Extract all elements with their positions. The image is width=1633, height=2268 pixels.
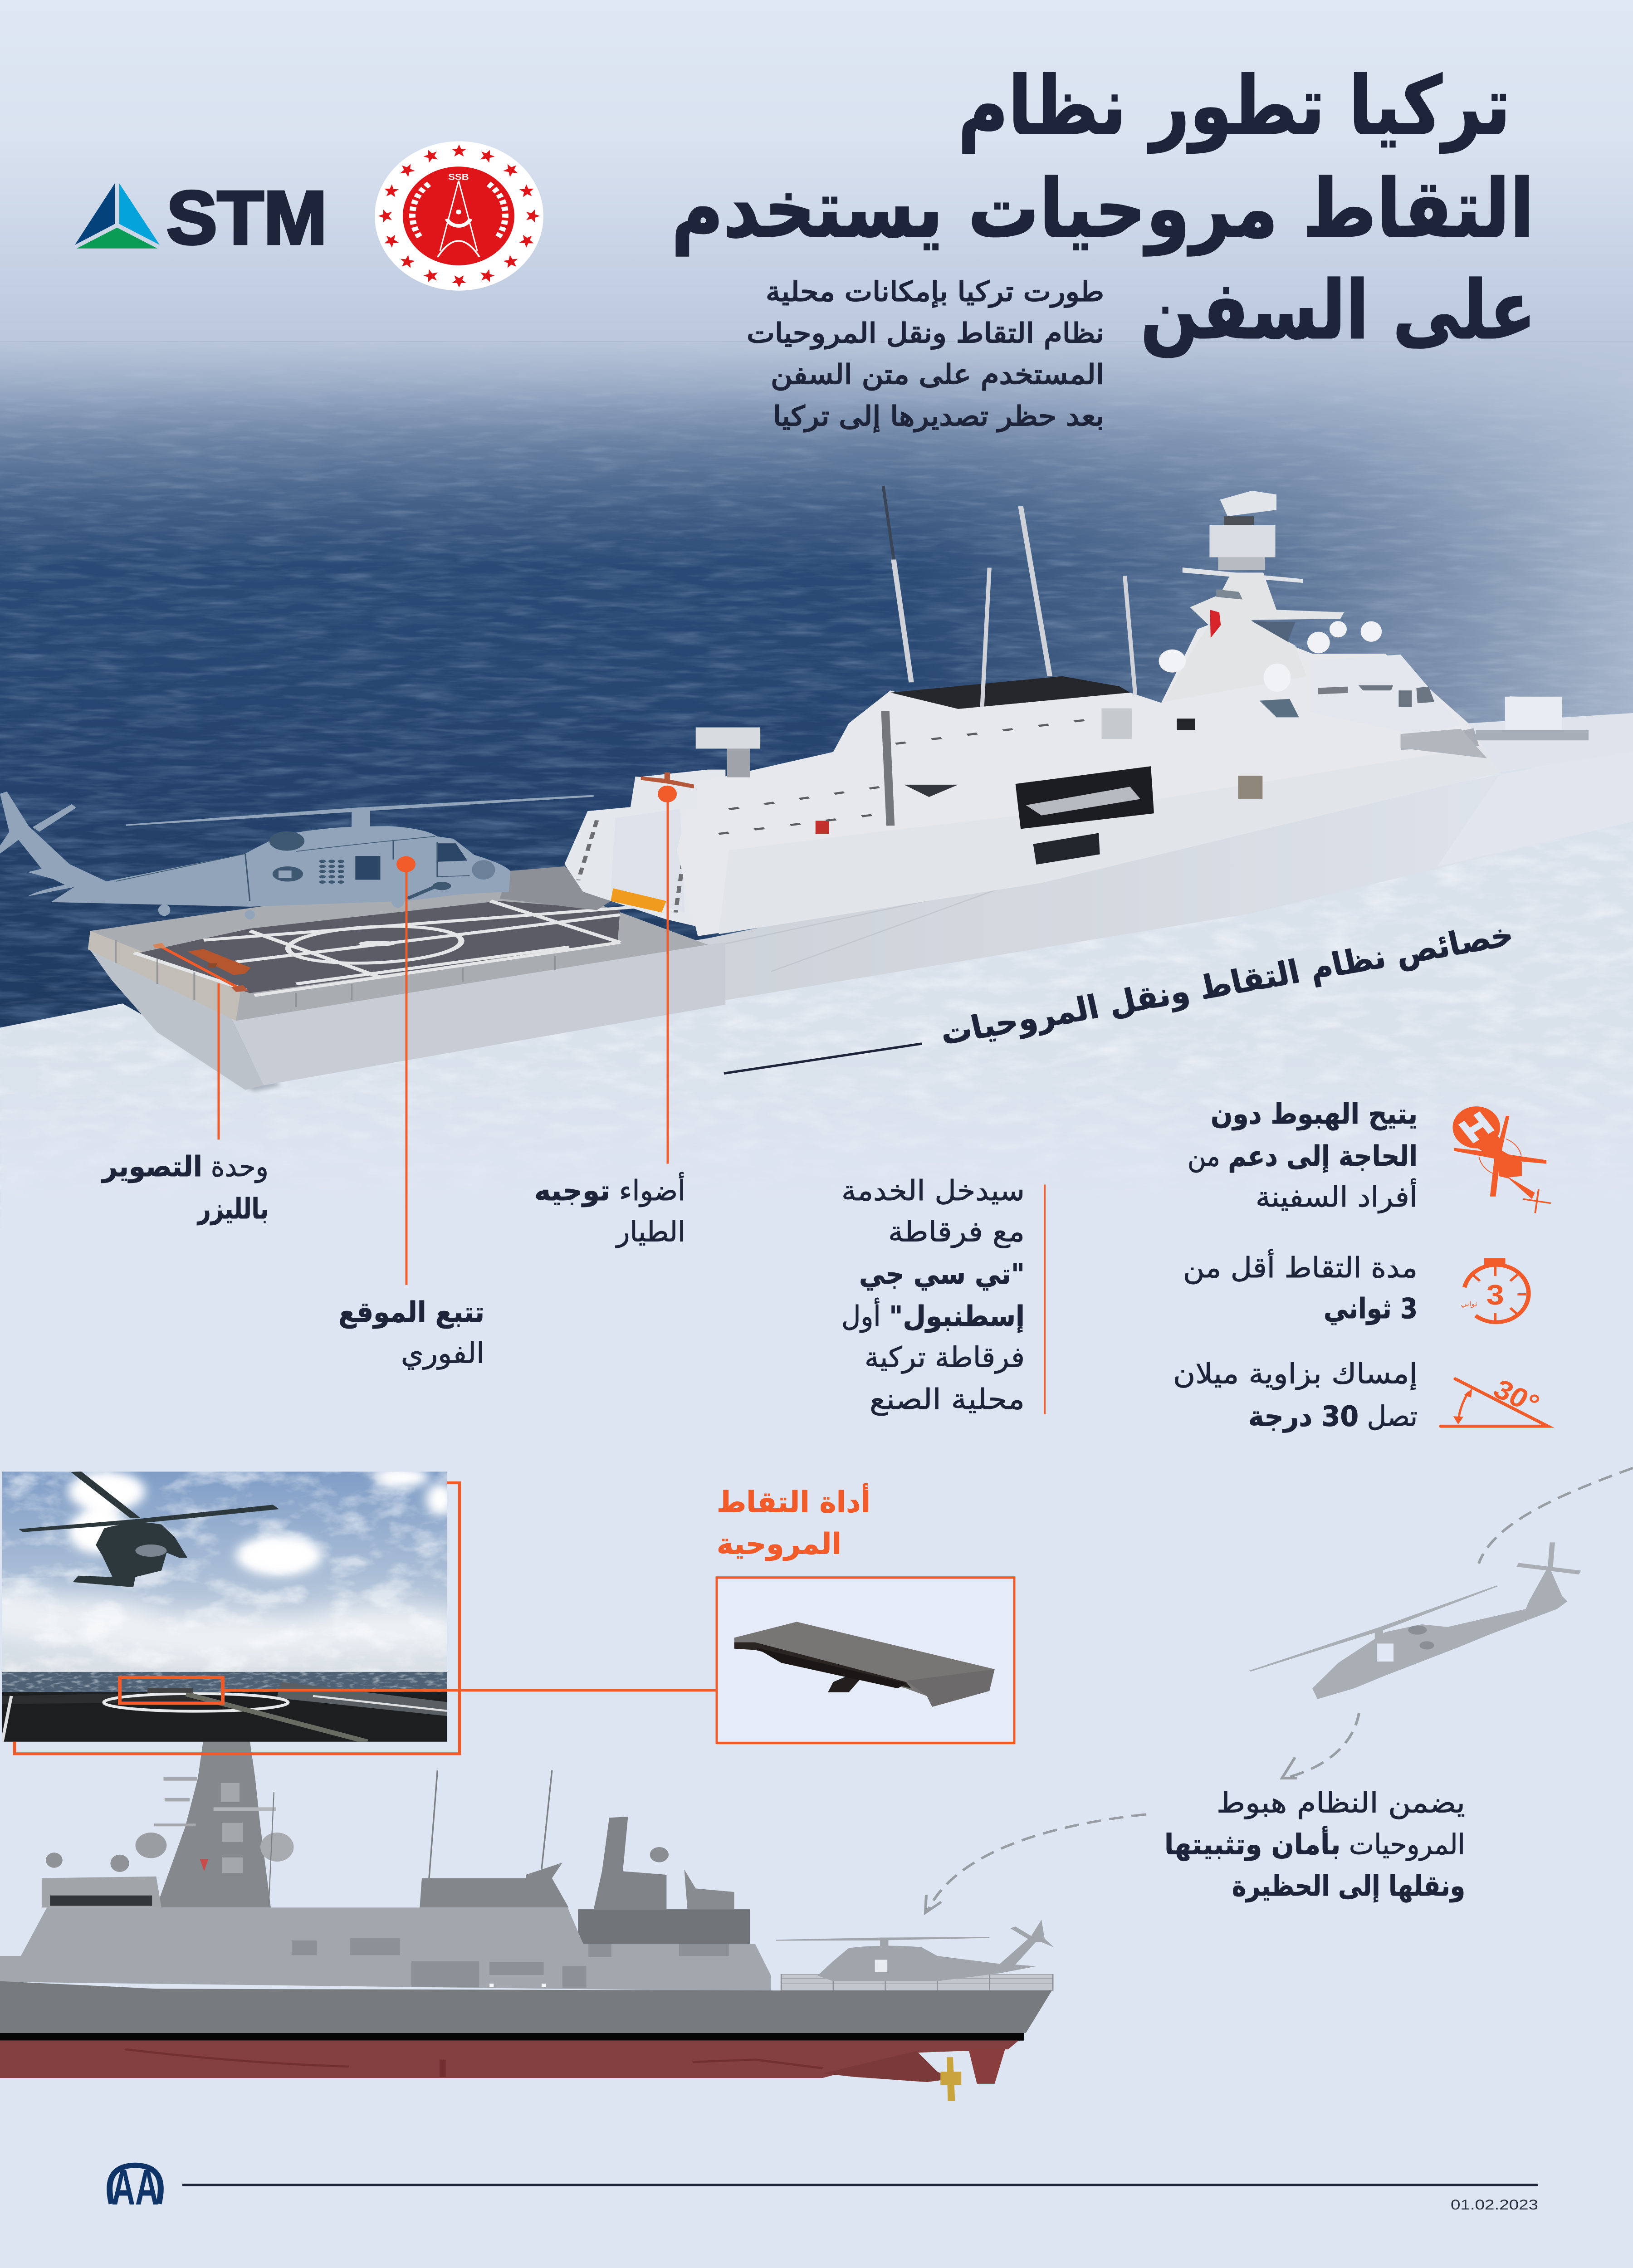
clouds (68, 1467, 454, 1575)
ship wake (0, 762, 1633, 1144)
mast and radars (1101, 491, 1589, 799)
footer: AA logo: AA (112, 2160, 159, 2216)
section heading: خصائص نظام التقاط ونقل المروحيات (937, 915, 1517, 1053)
feature: tilt (1173, 1357, 1418, 1432)
heading: capture tool: المروحية (717, 1528, 841, 1561)
text block: TCG Istanbul: إسطنبول" أول (841, 1298, 1025, 1333)
sea photo (0, 341, 1633, 1144)
top sky gradient (0, 0, 1633, 345)
footer: AA logo (110, 2160, 161, 2216)
logo: SSB emblem: SSB (448, 172, 469, 182)
subtitle: طورت تركيا بإمكانات محلية (766, 276, 1104, 308)
feature: landing: الحاجة إلى دعم من (1188, 1140, 1418, 1173)
feature: landing (1188, 1098, 1418, 1213)
text block: TCG Istanbul: "تي سي جي (859, 1258, 1025, 1290)
pointer lines (219, 786, 677, 1285)
hull side (235, 750, 1633, 1083)
label: laser imaging unit: وحدة التصوير (101, 1150, 269, 1183)
feature: tilt: إمساك بزاوية ميلان (1173, 1357, 1418, 1390)
label: real-time position tracking: تتبع الموقع (338, 1296, 484, 1329)
label: pilot guidance lights: أضواء توجيه (534, 1172, 685, 1207)
mast (156, 1742, 271, 1907)
text block: system ensures safe landing: يضمن النظام هبوط (1217, 1786, 1465, 1819)
CIWS radar on stern (696, 728, 760, 748)
landing light fixture (641, 772, 694, 788)
title (671, 59, 1536, 357)
logo: SSB emblem (375, 142, 543, 291)
label: pilot guidance lights (534, 1172, 685, 1248)
stern shadow (154, 1003, 281, 1092)
icon: 30 degree angle (1441, 1374, 1548, 1426)
subtitle: نظام التقاط ونقل المروحيات (747, 318, 1104, 349)
feature: landing: أفراد السفينة (1256, 1178, 1418, 1213)
tool drawing (734, 1622, 995, 1707)
icon: helicopter top view (1452, 1106, 1551, 1213)
label: real-time position tracking (338, 1296, 484, 1369)
logo: STM (75, 175, 327, 260)
feature: capture time: مدة التقاط أقل من (1183, 1249, 1418, 1284)
photo frame (15, 1483, 717, 1754)
side view frigate (0, 1742, 1054, 2101)
helicopter in flight over deck (0, 792, 594, 919)
text block: TCG Istanbul: محلية الصنع (870, 1383, 1025, 1416)
icon: 30 degree angle: 30° (1488, 1374, 1545, 1419)
helicopter on deck (776, 1920, 1054, 1981)
heading: capture tool: أداة التقاط (717, 1483, 870, 1520)
feature: tilt: تصل 30 درجة (1248, 1400, 1418, 1432)
helideck railing (781, 1974, 1053, 1990)
text block: system ensures safe landing (1164, 1786, 1465, 1903)
deck markings (104, 1694, 288, 1711)
frigate photo (0, 486, 1633, 1092)
label: laser imaging unit (101, 1150, 269, 1226)
superstructure (630, 486, 1633, 936)
arrow heads (925, 1757, 1297, 1913)
section heading (724, 915, 1517, 1073)
wake fade into page (1, 1052, 1633, 1237)
feature: capture time: 3 ثواني (1324, 1292, 1418, 1325)
text block: system ensures safe landing: ونقلها إلى الحظيرة (1232, 1870, 1465, 1903)
hull streaks (408, 807, 1225, 1012)
subtitle: المستخدم على متن السفن (771, 359, 1104, 391)
icon: stopwatch: ثواني (1461, 1300, 1477, 1308)
dashed arrow: descending to lower text (928, 1468, 1633, 1911)
subtitle (747, 276, 1104, 432)
superstructure (0, 1907, 771, 1991)
helicopter silhouette upper right (1249, 1542, 1581, 1699)
logo: STM: STM (166, 175, 327, 260)
photo: helicopter approaching deck (0, 1467, 476, 1742)
date: 01.02.2023 (1451, 2197, 1538, 2213)
footer rule (182, 2184, 1538, 2186)
icon: stopwatch (1461, 1258, 1529, 1322)
text block: TCG Istanbul: مع فرقاطة (888, 1215, 1025, 1248)
text block: TCG Istanbul: سيدخل الخدمة (841, 1174, 1025, 1207)
text block: TCG Istanbul (841, 1174, 1046, 1416)
antennas (883, 486, 1135, 707)
text block: TCG Istanbul: فرقاطة تركية (865, 1341, 1025, 1374)
text block: system ensures safe landing: المروحيات بأمان وتثبيتها (1164, 1826, 1465, 1862)
label: laser imaging unit: بالليزر (197, 1193, 269, 1226)
hangar stern (564, 770, 725, 933)
hull (0, 1981, 1052, 2033)
laser imaging unit (153, 943, 251, 992)
icon: stopwatch: 3 (1486, 1280, 1504, 1311)
label: real-time position tracking: الفوري (401, 1337, 484, 1369)
feature: landing: يتيح الهبوط دون (1211, 1098, 1418, 1131)
heading: capture tool (717, 1483, 870, 1561)
helicopter (19, 1471, 279, 1587)
label: pilot guidance lights: الطيار (615, 1215, 685, 1248)
stern and helideck (88, 770, 725, 1090)
subtitle: بعد حظر تصديرها إلى تركيا (773, 401, 1104, 432)
panel: capture tool (716, 1576, 1015, 1744)
boat bay (1016, 766, 1154, 829)
feature: capture time (1183, 1249, 1418, 1325)
